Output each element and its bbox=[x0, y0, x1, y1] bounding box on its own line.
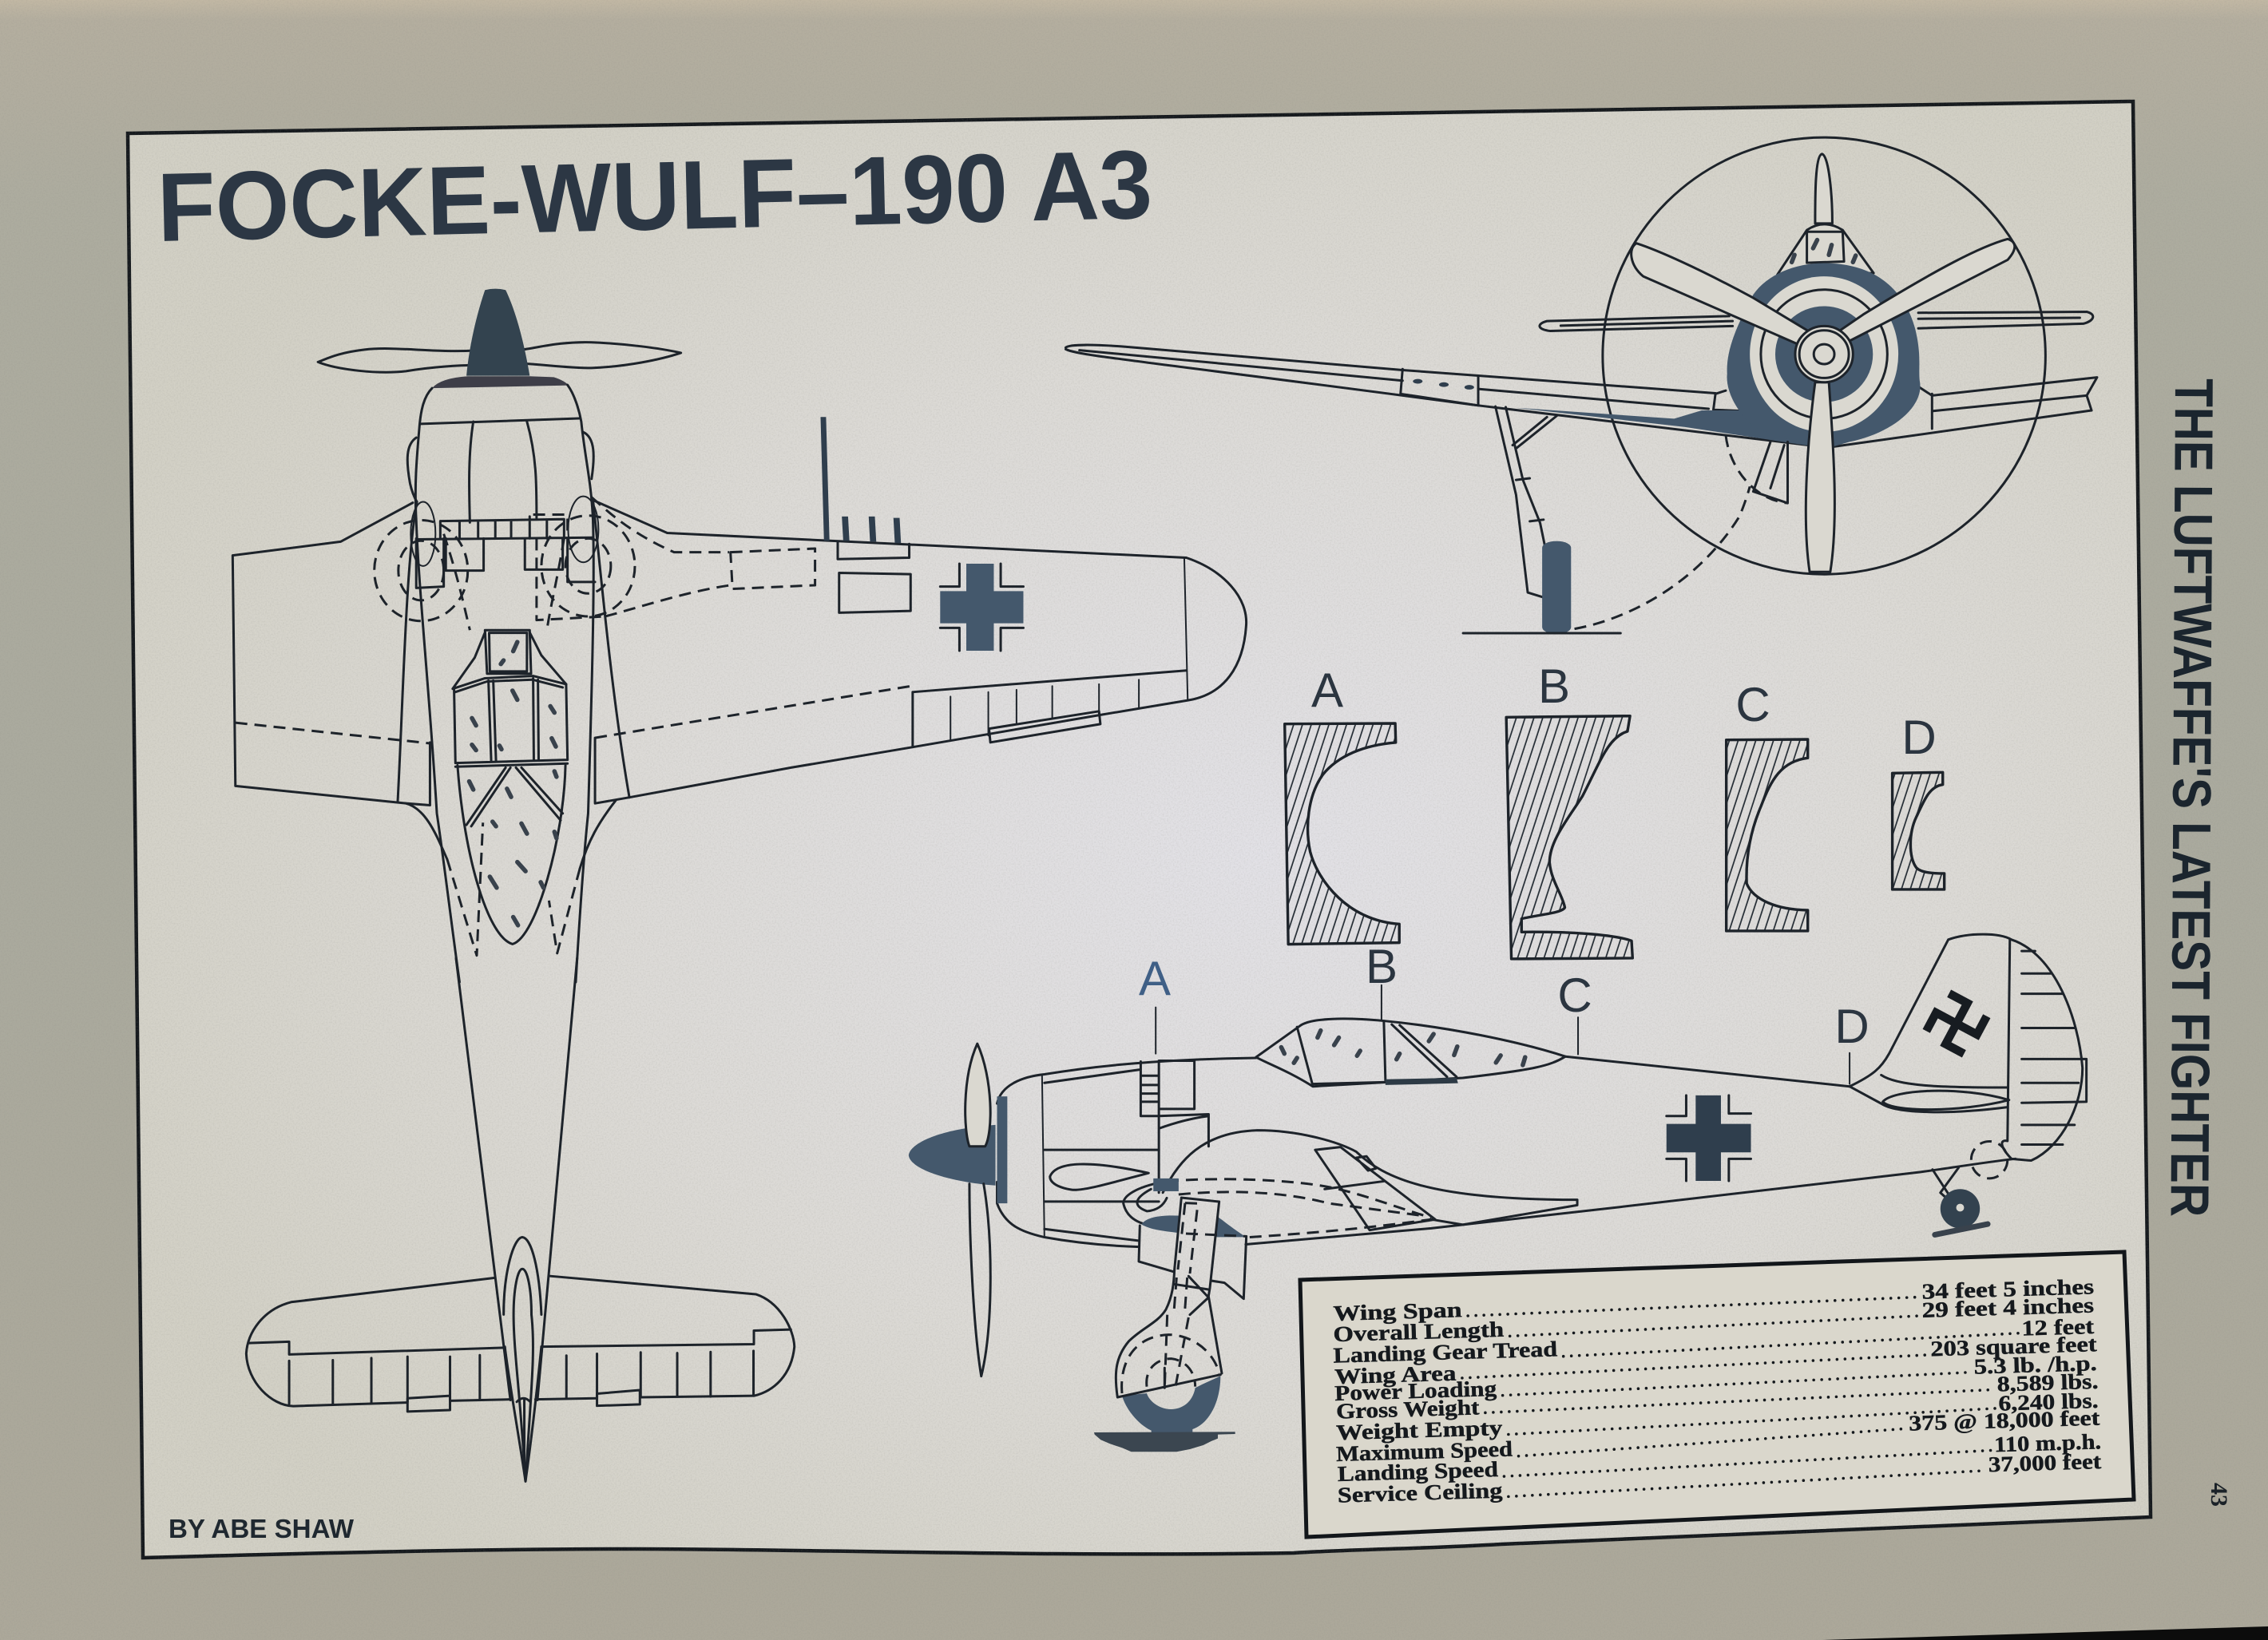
section D bbox=[1893, 772, 1945, 889]
row: gross weight: 8,589 lbs. bbox=[1996, 1369, 2099, 1396]
wheel well shadows bbox=[1141, 1215, 1247, 1237]
section label D: D bbox=[1901, 711, 1937, 764]
propeller arc circle bbox=[1603, 137, 2045, 574]
section label C: C bbox=[1735, 678, 1770, 731]
left wing bbox=[232, 503, 430, 805]
left wing from front bbox=[1065, 345, 1808, 446]
hidden gear lines bbox=[1122, 1203, 1246, 1393]
propeller blades bbox=[318, 343, 681, 372]
row: service ceiling: Service Ceiling bbox=[1337, 1479, 1503, 1507]
section leader line A bbox=[1155, 1008, 1156, 1054]
main landing gear bbox=[1094, 1198, 1247, 1452]
side label C: C bbox=[1557, 969, 1592, 1022]
row: power loading: 5.3 lb. /h.p. bbox=[1973, 1351, 2097, 1379]
row: power loading: Power Loading bbox=[1334, 1377, 1497, 1405]
row: overall length bbox=[1333, 1293, 2094, 1346]
wing underside shadow bbox=[1516, 408, 1832, 446]
propeller side bbox=[965, 1044, 990, 1377]
main gear from front bbox=[1463, 406, 1620, 634]
left tailplane bbox=[246, 1278, 510, 1412]
row: landing speed: Landing Speed bbox=[1337, 1457, 1498, 1486]
spinner bbox=[466, 289, 529, 376]
row: landing speed: 110 m.p.h. bbox=[1994, 1429, 2102, 1456]
canopy from front bbox=[1778, 224, 1873, 275]
side heading: THE LUFTWAFFE'S LATEST FIGHTER bbox=[2159, 378, 2224, 1217]
engine cowling rings bbox=[1727, 263, 1921, 447]
row: overall length: 29 feet 4 inches bbox=[1921, 1293, 2094, 1322]
row: landing gear tread: 12 feet bbox=[2021, 1314, 2094, 1341]
page frame bbox=[128, 101, 2151, 1558]
section leader line D bbox=[1849, 1053, 1850, 1084]
fin from front bbox=[1815, 154, 1832, 224]
row: landing speed bbox=[1337, 1429, 2102, 1486]
wing section diagrams bbox=[1285, 716, 1945, 959]
cowling ring bbox=[432, 376, 569, 388]
side label A: A bbox=[1139, 952, 1171, 1005]
specification rows bbox=[1333, 1274, 2102, 1507]
row: overall length: Overall Length bbox=[1333, 1317, 1505, 1346]
wing guns bbox=[820, 417, 901, 543]
row: wing area bbox=[1334, 1332, 2097, 1388]
fuselage outline bbox=[398, 385, 629, 982]
fuselage cross insignia bbox=[1667, 1095, 1751, 1181]
plan view tail bbox=[246, 958, 795, 1481]
row: maximum speed: 375 @ 18,000 feet bbox=[1909, 1406, 2100, 1436]
tail marking (historical insignia) bbox=[1925, 992, 1988, 1055]
row: landing gear tread: Landing Gear Tread bbox=[1333, 1337, 1558, 1368]
folded gear door bbox=[1753, 442, 1787, 503]
side label B: B bbox=[1366, 940, 1398, 993]
dark page edge bbox=[1822, 1626, 2268, 1640]
row: wing span: Wing Span bbox=[1333, 1297, 1462, 1325]
row: maximum speed: Maximum Speed bbox=[1336, 1436, 1513, 1466]
box outline bbox=[1300, 1252, 2134, 1537]
front view bbox=[1065, 137, 2097, 634]
row: weight empty: 6,240 lbs. bbox=[1998, 1388, 2099, 1416]
plan view: aircraft from above bbox=[232, 289, 1247, 1481]
radiator and landing gear bays bbox=[375, 497, 635, 630]
specification box bbox=[1300, 1252, 2134, 1537]
wing cross insignia bbox=[940, 564, 1023, 651]
row: power loading bbox=[1334, 1351, 2097, 1405]
section leader line C bbox=[1577, 1017, 1579, 1055]
row: weight empty: Weight Empty bbox=[1336, 1416, 1503, 1444]
tailplane from front bbox=[1540, 312, 2093, 331]
credit: BY ABE SHAW bbox=[169, 1514, 355, 1543]
fin and rudder bbox=[1850, 934, 2087, 1161]
section C bbox=[1727, 739, 1808, 931]
section leader line B bbox=[1381, 985, 1382, 1020]
row: service ceiling bbox=[1337, 1449, 2101, 1507]
tailplane side bbox=[1850, 1075, 2009, 1112]
right wing bbox=[592, 497, 1247, 803]
row: wing span bbox=[1333, 1274, 2094, 1325]
canopy side bbox=[1256, 1019, 1565, 1087]
section A bbox=[1285, 723, 1399, 945]
section B bbox=[1506, 716, 1632, 959]
row: gross weight: Gross Weight bbox=[1336, 1395, 1480, 1424]
section label B: B bbox=[1538, 660, 1570, 713]
plan view upper: nose, wings and cockpit bbox=[232, 289, 1247, 982]
row: maximum speed bbox=[1336, 1406, 2100, 1466]
side label D: D bbox=[1834, 1000, 1870, 1053]
rear wing fillets bbox=[406, 801, 616, 956]
section label A: A bbox=[1311, 664, 1343, 717]
row: weight empty bbox=[1336, 1388, 2099, 1444]
left wing spar bbox=[236, 723, 430, 743]
spinner side bbox=[909, 1125, 996, 1186]
propeller hub bbox=[1795, 326, 1853, 382]
side view bbox=[909, 934, 2087, 1452]
row: gross weight bbox=[1336, 1369, 2099, 1424]
radiator panel bbox=[1140, 1061, 1208, 1193]
row: wing area: 203 square feet bbox=[1930, 1332, 2097, 1361]
canopy bbox=[453, 630, 568, 944]
gear retraction arc bbox=[1575, 435, 1787, 629]
fin and rudder bbox=[504, 1238, 541, 1481]
propeller blades front bbox=[1632, 239, 2015, 572]
ground shading bbox=[1094, 1432, 1235, 1452]
tail wheel bbox=[1933, 1141, 2008, 1234]
row: wing area: Wing Area bbox=[1334, 1361, 1457, 1388]
rear fuselage bbox=[456, 958, 577, 1400]
exhaust slot bbox=[1050, 1164, 1148, 1190]
page number: 43 bbox=[2206, 1483, 2232, 1507]
gear leg and doors bbox=[1116, 1198, 1247, 1397]
wing root fairing bbox=[1124, 1131, 1577, 1238]
row: wing span: 34 feet 5 inches bbox=[1921, 1274, 2094, 1304]
fuselage outline bbox=[997, 1056, 2016, 1247]
right wing from front bbox=[1832, 378, 2097, 447]
row: landing gear tread bbox=[1333, 1314, 2094, 1368]
title: FOCKE-WULF–190 A3 bbox=[156, 130, 1153, 262]
main wheel bbox=[1122, 1376, 1220, 1433]
right tailplane bbox=[535, 1276, 795, 1406]
side view airframe bbox=[909, 934, 2087, 1377]
row: service ceiling: 37,000 feet bbox=[1988, 1449, 2101, 1476]
